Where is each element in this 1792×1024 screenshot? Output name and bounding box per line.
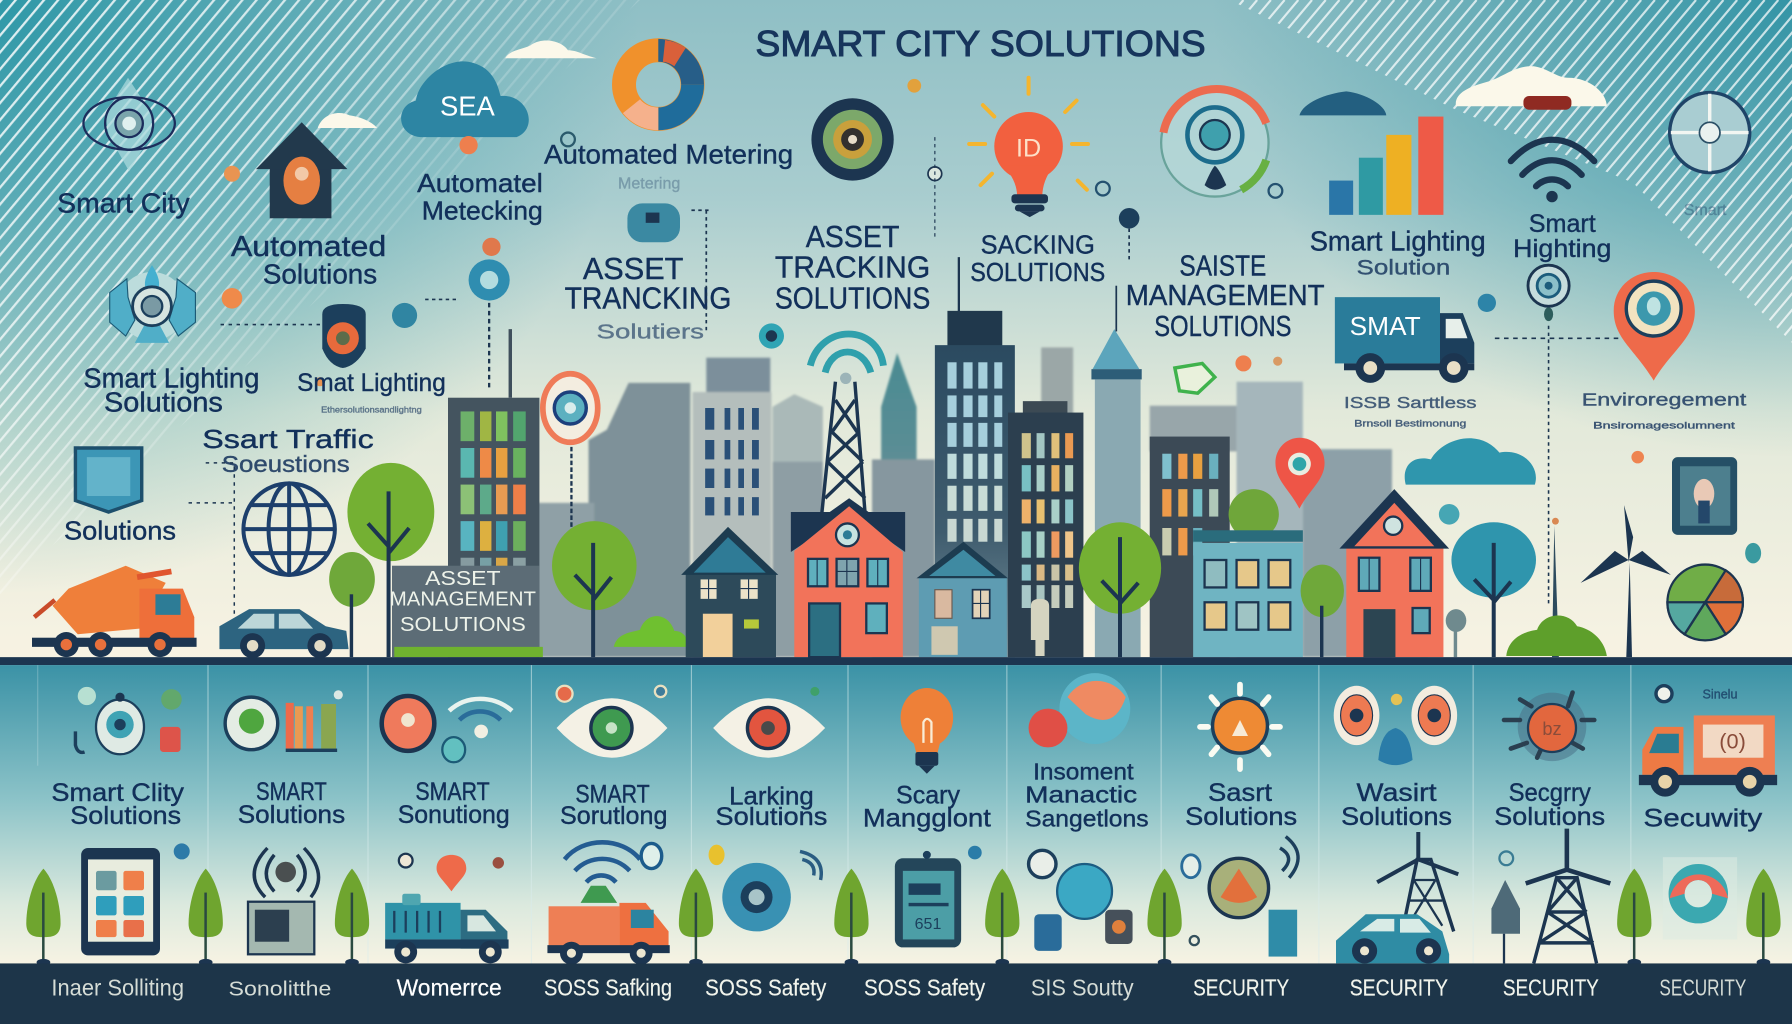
label: Smart Traffic (202, 424, 374, 477)
label: Automated Metecking: Automatel (417, 168, 543, 198)
icon: tablet (1672, 457, 1737, 535)
column labels: Solutions (715, 804, 827, 831)
label: Asset Management Solutions: ASSET (425, 567, 501, 590)
house: dark teal (681, 527, 778, 657)
icon: lightbulb (969, 78, 1088, 217)
icon: car (219, 609, 349, 658)
footer labels: SECURITY (1503, 974, 1599, 1000)
label: Automated Metering: Automated Metering (544, 139, 793, 169)
column labels: Wasirt (1357, 780, 1437, 807)
label: Sarttless (1344, 395, 1477, 428)
label: Asset Tranking: ASSET (583, 251, 684, 286)
house: orange right (1339, 489, 1449, 657)
label: faded metering: Metering (618, 176, 680, 193)
label: faded smart: Smart (1684, 202, 1727, 219)
label: Asset Management Solutions: MANAGEMENT (390, 588, 536, 611)
label: Enviroment (1582, 390, 1747, 431)
footer labels: Sonolitthe (229, 977, 331, 1000)
icon: white cloud with red (1456, 66, 1607, 110)
label: Asset Tranking: Solutiers (597, 320, 704, 343)
column 10 icon: splat (1504, 693, 1594, 761)
bush behind building (1229, 489, 1279, 539)
column labels: Larking (729, 784, 814, 811)
tree: large left (347, 463, 434, 657)
icon: gauge (1161, 89, 1269, 197)
icon: eye Smart City (83, 78, 175, 171)
icon: teal cloud (1405, 438, 1536, 485)
label: Smart Traffic: Soeustions (222, 451, 350, 477)
icon: SEA cloud: SEA (440, 90, 496, 121)
label: Enviroment: Enviroregement (1582, 390, 1747, 410)
tree: mid left (552, 521, 637, 657)
label: Solutions shield: Solutions (64, 515, 176, 545)
icon: SMAT truck: SMAT (1350, 311, 1421, 341)
column labels: Solutions (1185, 804, 1297, 831)
icon: wifi (1511, 140, 1594, 202)
panel: footer band (0, 963, 1792, 1024)
column 4 icon: green eye (557, 686, 667, 758)
lower icon: meter (895, 846, 982, 947)
house: blue small (917, 542, 1008, 657)
column 9 icon: twin rings (1334, 686, 1457, 765)
icon: crosshair circle (1670, 93, 1750, 173)
label: Sarttless: ISSB Sarttless (1344, 395, 1477, 412)
icon: lamp small (1408, 609, 1466, 657)
lower icon: gauge ring (1182, 837, 1298, 957)
icon: orange camera (221, 303, 417, 368)
label: Smart Lighting Solutions left: Solutions (104, 386, 223, 417)
label: Smat Lighting: Ethersolutionsandlightng (321, 406, 422, 415)
column 10 icon: splat: bz (1542, 718, 1562, 739)
icon: target pole (543, 374, 598, 537)
label: Asset Management Solutions (390, 567, 536, 636)
column labels: Secuwity (1643, 805, 1763, 832)
label: Sarttless: Brnsoll Bestimonung (1354, 418, 1466, 428)
icon: tall pole (1552, 518, 1559, 657)
icon: blue shield (75, 448, 142, 512)
label: Smart Highting: Smart (1529, 210, 1596, 238)
column labels: Smart Clity (51, 780, 185, 807)
house: orange (791, 498, 905, 657)
label: Asset Tranking (565, 251, 731, 343)
lower icon: gear and arcs (709, 845, 821, 931)
label: Sacking Solutions (970, 230, 1105, 287)
label: Asset Tracking Solutions centre (775, 219, 930, 316)
lower icon: meter: 651 (915, 916, 941, 933)
label: Saiste Management Solutions (1126, 250, 1325, 343)
column labels: Solutions (1341, 804, 1452, 831)
label: Saiste Management Solutions: SAISTE (1179, 250, 1266, 282)
icon: wind turbine (1581, 505, 1671, 657)
ground line (0, 657, 1792, 665)
label: Automated Solutions (231, 231, 386, 289)
tree: centre right (1079, 522, 1161, 657)
lower icon: lattice tower (1491, 829, 1610, 963)
column labels: SMART (575, 781, 650, 808)
background sky (0, 0, 1792, 665)
label: Smart Lighting Solution: Smart Lighting (1310, 225, 1486, 256)
building: tall blue tower (935, 257, 1015, 657)
label: Smart Traffic: Ssart Traffic (202, 424, 374, 454)
footer labels: SECURITY (1193, 974, 1289, 1000)
column 2 icon: ring and bars (225, 690, 343, 752)
column 1 icon: camera ring (75, 687, 182, 754)
column labels: Mangglont (863, 805, 991, 832)
bush (614, 616, 688, 647)
column labels: Insoment (1033, 758, 1134, 784)
icon: small teal dot (1439, 504, 1459, 525)
column labels: Solutions (238, 802, 345, 829)
column labels: Secgrry (1509, 780, 1592, 807)
footer labels: SOSS Safety (705, 974, 827, 1000)
column 11 icon: orange truck: Sinelu (1703, 687, 1737, 701)
label: Asset Tranking: TRANCKING (565, 281, 731, 316)
icon: camera ring (811, 98, 894, 181)
label: Smart Highting (1513, 210, 1611, 263)
label: Automated Solutions: Solutions (263, 258, 377, 289)
icon: wifi tower (810, 334, 883, 514)
label: Saiste Management Solutions: MANAGEMENT (1126, 280, 1325, 312)
lower icon: pin and truck teal (385, 854, 509, 963)
label: Asset Tracking Solutions centre: SOLUTIONS (775, 281, 930, 316)
label: Smart Lighting Solution (1310, 225, 1486, 279)
column labels: Solutions (70, 803, 181, 830)
column 11 icon: orange truck (1639, 686, 1777, 797)
column labels: Solutions (1494, 804, 1605, 831)
panel: bottom band (0, 665, 1792, 965)
building: coloured windows centre (1008, 401, 1083, 657)
label: Smart Lighting Solutions left: Smart Lighting (83, 362, 259, 393)
column 6 icon: bulb (901, 688, 953, 774)
label: Smart Highting: Highting (1513, 235, 1611, 263)
building: dark tower with coloured windows left (392, 329, 543, 657)
icon: green bush right (1506, 615, 1607, 656)
icon: target with dotted line (1478, 265, 1623, 606)
label: Asset Management Solutions: SOLUTIONS (400, 613, 526, 636)
building: spire (1091, 286, 1142, 657)
title: SMART CITY SOLUTIONS (755, 23, 1206, 64)
building: teal low (1193, 530, 1303, 657)
icon: small white cloud (505, 40, 597, 58)
footer labels: Inaer Solliting (51, 974, 184, 1000)
icon: dark cloud (1299, 91, 1386, 115)
icon: orange dot (1631, 451, 1644, 463)
label: Smart Lighting Solution: Solution (1357, 254, 1450, 279)
label: Sacking Solutions: SOLUTIONS (970, 257, 1105, 287)
icon: dashed connector left (189, 463, 234, 640)
icon: SEA cloud (401, 61, 529, 154)
icon: lightbulb: ID (1016, 135, 1041, 163)
chart: bar chart (1329, 117, 1443, 215)
icon: dotted connector (691, 210, 709, 331)
label: Smart Lighting Solutions left (83, 362, 259, 417)
icon: globe (243, 483, 335, 575)
icon: blue circle pin (425, 259, 510, 391)
icon: gear (110, 265, 195, 343)
label: Smart City: Smart City (57, 188, 190, 219)
icon: SMAT truck (1335, 297, 1474, 383)
icon: small dots top (907, 79, 1282, 263)
lower icon: turbine tower and car (1336, 832, 1458, 963)
icon: red map pin (1275, 438, 1325, 509)
icon: house automated (256, 122, 347, 218)
icon: donut chart (623, 39, 704, 130)
label: Automated Metecking (417, 168, 543, 225)
column labels: Manactic (1025, 781, 1137, 807)
lower icon: tablet (81, 843, 190, 955)
icon: small pin teal (1745, 543, 1761, 563)
footer labels (51, 974, 1746, 1000)
column 8 icon: sun (1200, 685, 1280, 769)
footer labels: SIS Soutty (1031, 974, 1134, 1000)
footer labels: SOSS Safety (864, 974, 986, 1000)
lower icon: connected circles (1029, 850, 1133, 951)
icon: small cloud near house (318, 113, 377, 128)
lower icon: sensor (248, 848, 319, 954)
label: Automated Metecking: Metecking (422, 195, 543, 225)
column 7 icon: circles (1029, 673, 1130, 747)
label: Smat Lighting (297, 369, 446, 415)
label: Saiste Management Solutions: SOLUTIONS (1154, 311, 1291, 343)
icon: target small teal (759, 323, 784, 349)
building: coloured windows right (1150, 437, 1230, 657)
column labels: Scary (896, 782, 961, 809)
footer labels: SOSS Safking (544, 974, 672, 1000)
lower icon: wifi and truck orange (547, 842, 670, 965)
label: Asset Tracking Solutions centre: TRACKING (775, 250, 930, 285)
footer labels: SECURITY (1659, 974, 1746, 1000)
distant skyline (537, 347, 1392, 657)
column 5 icon: red eye (713, 687, 825, 758)
label: Sacking Solutions: SACKING (981, 230, 1095, 260)
label: Smat Lighting: Smat Lighting (297, 369, 446, 397)
footer labels: SECURITY (1350, 974, 1448, 1000)
icon: orange balls (1235, 355, 1282, 371)
label: Asset Tracking Solutions centre: ASSET (806, 219, 900, 254)
icon: green shield (1175, 363, 1215, 393)
label: Automated Solutions: Automated (231, 231, 386, 263)
footer labels: Womerrce (397, 974, 502, 1000)
tree: small left (329, 552, 375, 657)
column 3 icon: ring and wifi (382, 696, 512, 762)
skyline windows (705, 408, 759, 515)
icon: small orange dots left (222, 133, 575, 386)
lower icon: donut (1663, 857, 1737, 939)
icon: blue tree right (1451, 522, 1536, 657)
tree: small right (1301, 565, 1344, 657)
column labels: SMART (415, 779, 490, 806)
column 11 icon: orange truck: (0) (1719, 729, 1746, 754)
icon: map pin (1614, 272, 1695, 381)
column labels: Sasrt (1208, 780, 1272, 807)
column labels: SMART (256, 779, 327, 806)
icon: pill (627, 203, 680, 242)
column labels: Sorutlong (560, 803, 667, 830)
column dividers (38, 665, 1631, 963)
label: Enviroment: Bnsiromagesolumnent (1593, 421, 1736, 431)
icon: cement truck (32, 566, 197, 657)
column labels: Sangetlons (1025, 805, 1149, 831)
column labels (51, 758, 1763, 832)
icon: pie chart (1667, 565, 1743, 640)
trees: bottom row (26, 869, 1781, 966)
column labels: Sonutiong (398, 802, 510, 829)
